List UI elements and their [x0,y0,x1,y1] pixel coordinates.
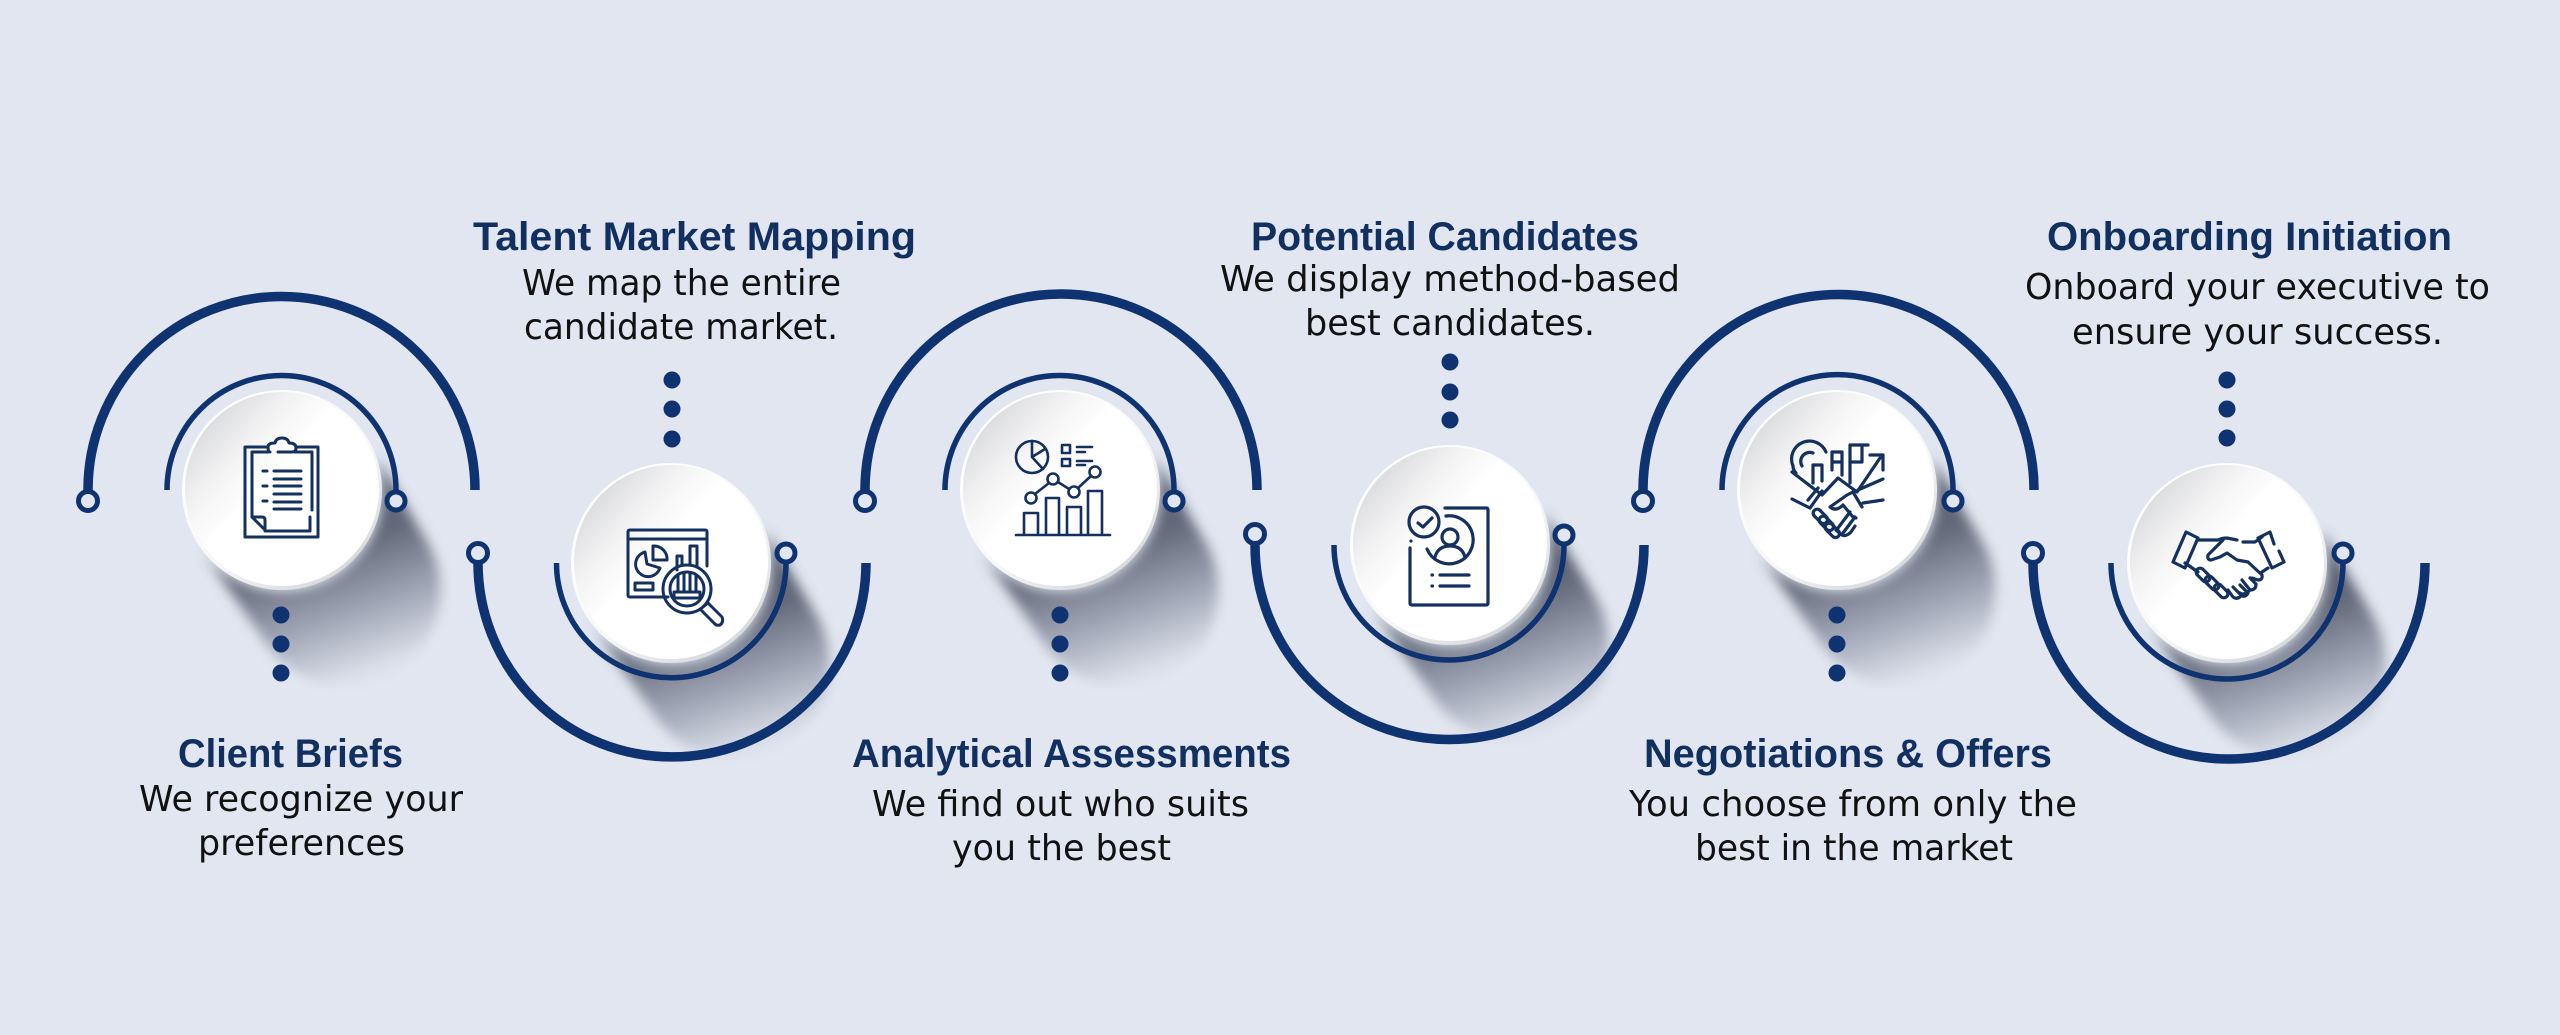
icon: charts [1016,441,1110,535]
description: analytical assessments [872,784,1249,869]
heading: client briefs: Client Briefs [178,732,403,776]
shadows behind the circles [197,456,2385,758]
description: talent market mapping: candidate market. [524,307,838,348]
icon: handshake with growth chart [1792,441,1883,539]
heading: potential candidates: Potential Candidates [1251,215,1639,259]
description: potential candidates: best candidates. [1305,303,1595,344]
description: talent market mapping: We map the entire [522,263,841,304]
outer arc 5 [1643,294,2034,490]
dots 3 [1052,606,1068,682]
icon: candidate profile [1409,507,1488,605]
description: onboarding initiation: Onboard your executive to [2025,267,2490,308]
description: client briefs [139,779,463,864]
dots 4 [1442,354,1458,428]
connector node inner 1 [387,492,405,510]
description: potential candidates: We display method-based [1220,259,1680,300]
dots 6 [2218,372,2236,446]
icon: dashboard with magnifier [628,530,723,625]
disc 2 [571,463,771,663]
heading: analytical assessments: Analytical Assessments [852,732,1291,776]
connector node outer 5 [1634,492,1652,510]
step 2: talent market mapping [468,215,916,757]
description: analytical assessments: you the best [952,828,1171,869]
outer arc 4 [1255,545,1644,740]
connector node outer 4 [1246,524,1264,544]
disc 3 [960,390,1160,590]
step 1: client briefs [78,296,475,864]
inner arc 6 [2111,563,2343,679]
description: onboarding initiation: ensure your success. [2072,312,2443,353]
disc 6 [2127,463,2327,663]
description: negotiations and offers [1628,784,2077,869]
description: talent market mapping [522,263,841,348]
connector node outer 2 [468,544,488,562]
description: client briefs: preferences [198,823,405,864]
connector node outer 6 [2024,544,2042,562]
outer arc 1 [88,296,475,490]
outer arc 3 [865,294,1257,490]
connector node inner 4 [1555,526,1573,544]
description: potential candidates [1220,259,1680,344]
step 4: potential candidates [1220,215,1680,740]
inner arc 2 [556,563,786,678]
connector node inner 3 [1165,492,1183,510]
step 3: analytical assessments [852,294,1291,869]
step 5: negotiations and offers [1628,294,2077,869]
description: negotiations and offers: You choose from only the [1628,784,2077,825]
connector node inner 5 [1944,492,1962,510]
icon: handshake [2173,532,2284,599]
inner arc 3 [945,376,1174,490]
outer arc 6 [2033,563,2425,759]
connector node outer 3 [856,492,874,510]
disc 5 [1737,390,1937,590]
connector node inner 6 [2334,544,2352,562]
dots 2 [664,372,680,448]
heading: negotiations and offers: Negotiations & Offers [1644,732,2052,776]
description: negotiations and offers: best in the market [1695,828,2013,869]
inner arc 1 [167,376,396,490]
connector node outer 1 [78,492,98,510]
disc 1 [182,390,382,590]
description: client briefs: We recognize your [139,779,463,820]
step 6: onboarding initiation [2024,215,2490,759]
description: onboarding initiation [2025,267,2490,353]
dots 5 [1828,606,1846,682]
connector node inner 2 [777,544,795,562]
description: analytical assessments: We find out who suits [872,784,1249,825]
icon: clipboard [245,438,318,537]
dots 1 [272,606,290,682]
disc 4 [1350,445,1550,645]
inner arc 4 [1334,545,1564,660]
outer arc 2 [478,563,866,757]
inner arc 5 [1722,375,1953,490]
heading: onboarding initiation: Onboarding Initiation [2047,215,2452,259]
heading: talent market mapping: Talent Market Mapping [473,215,916,259]
